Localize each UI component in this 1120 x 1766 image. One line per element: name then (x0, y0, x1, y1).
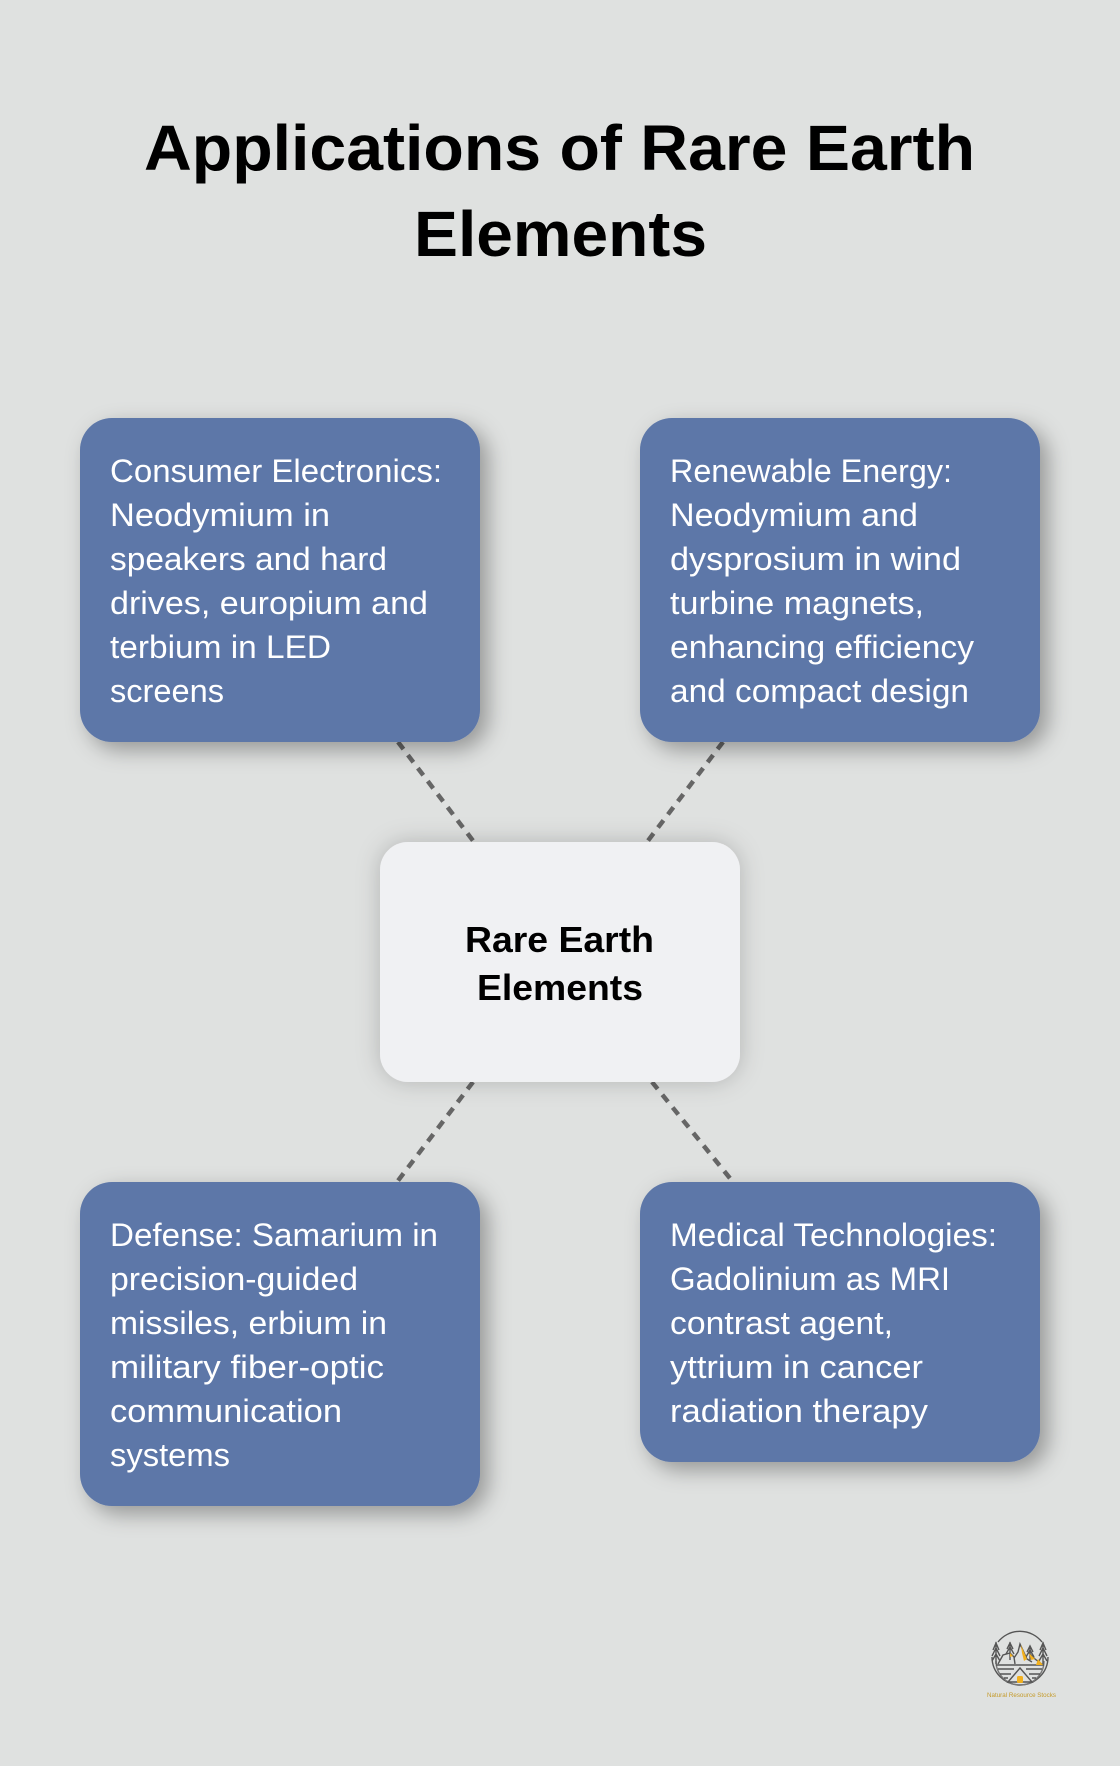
panel: defense: missiles, erbium in (110, 1305, 387, 1341)
connector: renewable energy to centre (647, 742, 723, 842)
title: Applications of Rare Earth (144, 112, 975, 184)
panel: centre node: Rare Earth (465, 919, 654, 960)
connector: consumer electronics to centre (398, 742, 474, 842)
title: Elements (414, 198, 707, 270)
panel: defense: precision-guided (110, 1261, 358, 1297)
panel: renewable energy: Neodymium and (670, 497, 918, 533)
panel: defense: Defense: Samarium in (110, 1217, 438, 1253)
panel: defense: systems (110, 1437, 230, 1473)
panel: consumer electronics: screens (110, 673, 224, 709)
panel: renewable energy: turbine magnets, (670, 585, 924, 621)
panel: consumer electronics: speakers and hard (110, 541, 387, 577)
panel: defense: military fiber-optic (110, 1349, 384, 1385)
panel: medical technologies: radiation therapy (670, 1393, 928, 1429)
connector: defense to centre (397, 1082, 473, 1182)
panel: medical technologies: contrast agent, (670, 1305, 893, 1341)
panel: consumer electronics (80, 418, 480, 742)
panel: renewable energy (640, 418, 1040, 742)
panel: medical technologies: Medical Technologies: (670, 1217, 997, 1253)
panel: consumer electronics: terbium in LED (110, 629, 331, 665)
title (144, 112, 975, 270)
panel: renewable energy: enhancing efficiency (670, 629, 974, 665)
panel: defense (80, 1182, 480, 1506)
panel: renewable energy: Renewable Energy: (670, 453, 952, 489)
icon: natural resource stocks logo: Natural Resource Stocks (987, 1692, 1057, 1699)
panel: consumer electronics: Neodymium in (110, 497, 330, 533)
panel: medical technologies (640, 1182, 1040, 1462)
panel: medical technologies: yttrium in cancer (670, 1349, 923, 1385)
panel: renewable energy: dysprosium in wind (670, 541, 961, 577)
panel: defense: communication (110, 1393, 342, 1429)
connector: medical technologies to centre (652, 1082, 733, 1182)
panel: consumer electronics: Consumer Electronics: (110, 453, 442, 489)
panel: renewable energy: and compact design (670, 673, 969, 709)
panel: centre node (380, 842, 740, 1082)
panel: centre node: Elements (477, 967, 643, 1008)
panel: medical technologies: Gadolinium as MRI (670, 1261, 950, 1297)
icon: natural resource stocks logo (987, 1631, 1057, 1699)
panel: consumer electronics: drives, europium and (110, 585, 428, 621)
